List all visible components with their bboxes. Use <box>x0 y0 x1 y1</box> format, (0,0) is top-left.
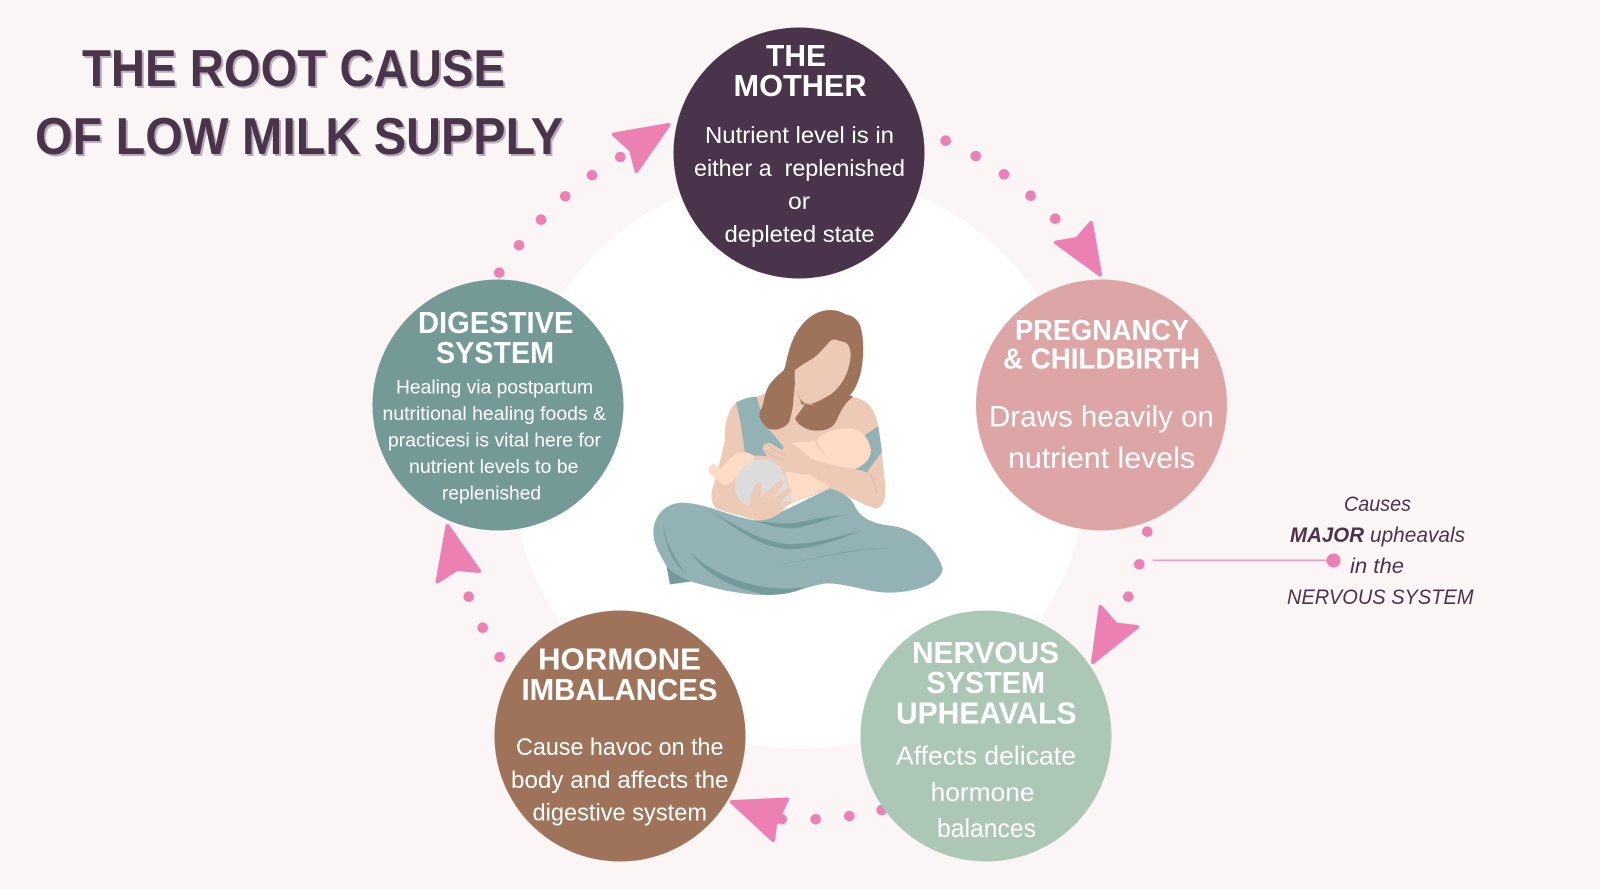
panel: the mother: either a replenished <box>694 155 905 181</box>
panel: pregnancy and childbirth: & CHILDBIRTH <box>1003 344 1200 376</box>
panel: hormone imbalances: body and affects the <box>511 767 728 794</box>
panel: the mother: depleted state <box>724 221 874 247</box>
panel: the mother: or <box>788 188 810 214</box>
panel: nervous system upheavals: UPHEAVALS <box>896 696 1076 730</box>
panel: hormone imbalances: digestive system <box>532 800 707 826</box>
panel: hormone imbalances: HORMONE <box>538 642 701 676</box>
callout: nervous system note <box>1153 493 1474 609</box>
dotted arrow: nervous system to hormone <box>732 800 887 840</box>
panel: digestive system: replenished <box>442 482 541 504</box>
panel: nervous system upheavals: balances <box>937 813 1036 843</box>
illustration: mother breastfeeding baby <box>653 310 943 595</box>
panel: the mother: MOTHER <box>734 68 866 103</box>
panel: digestive system: Healing via postpartum <box>396 376 593 398</box>
panel: nervous system upheavals: Affects delicate <box>896 740 1076 770</box>
panel: digestive system: nutrient levels to be <box>409 456 578 478</box>
title: THE ROOT CAUSE <box>82 40 505 98</box>
panel: digestive system: nutritional healing foods & <box>382 403 606 425</box>
panel: the mother <box>674 28 924 278</box>
panel: nervous system upheavals: SYSTEM <box>926 665 1045 700</box>
callout: nervous system note: Causes <box>1344 493 1411 516</box>
panel: the mother: Nutrient level is in <box>705 122 894 148</box>
dotted arrow: pregnancy to nervous system <box>1093 526 1153 662</box>
panel: nervous system upheavals: hormone <box>931 777 1035 807</box>
title <box>35 40 563 166</box>
panel: pregnancy and childbirth: Draws heavily on <box>989 400 1214 434</box>
panel: the mother: THE <box>766 38 826 73</box>
dotted arrow: hormone to digestive <box>438 526 505 662</box>
dotted arrow: digestive to mother <box>494 125 668 278</box>
panel: digestive system: practicesi is vital here for <box>388 430 602 452</box>
panel: nervous system upheavals: NERVOUS <box>912 635 1059 670</box>
panel: pregnancy and childbirth: nutrient levels <box>1008 442 1195 475</box>
dotted arrow: mother to pregnancy <box>940 135 1100 274</box>
callout: nervous system note: in the <box>1350 555 1404 578</box>
callout: nervous system note: MAJOR <box>1290 524 1365 547</box>
panel: hormone imbalances: IMBALANCES <box>522 672 718 707</box>
panel: digestive system: SYSTEM <box>436 335 554 370</box>
panel: nervous system upheavals <box>860 610 1112 862</box>
panel: digestive system <box>372 280 624 530</box>
panel: pregnancy and childbirth <box>976 280 1227 530</box>
panel: hormone imbalances: Cause havoc on the <box>516 734 724 761</box>
panel: hormone imbalances <box>494 610 746 862</box>
panel: pregnancy and childbirth: PREGNANCY <box>1015 315 1189 347</box>
title: OF LOW MILK SUPPLY <box>35 108 563 166</box>
callout: nervous system note: upheavals <box>1370 524 1465 547</box>
background white circle <box>510 170 1089 748</box>
callout: nervous system note: NERVOUS SYSTEM <box>1287 586 1474 609</box>
panel: digestive system: DIGESTIVE <box>418 305 574 340</box>
